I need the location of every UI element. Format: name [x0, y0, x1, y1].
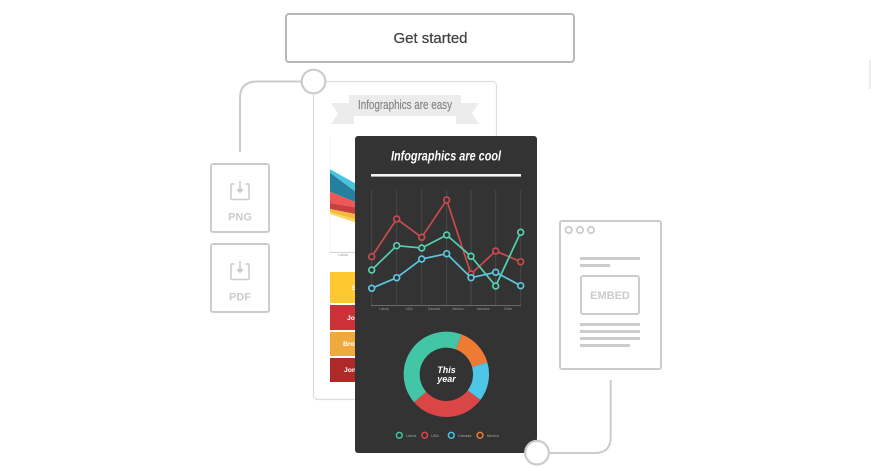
- embed button: EMBED: [590, 290, 630, 302]
- donut legend: Canada: [458, 434, 472, 438]
- line chart: Canada: [428, 307, 440, 311]
- table rows: Smith: [352, 285, 370, 292]
- icon: PDF download: [231, 261, 249, 280]
- donut chart: [412, 340, 481, 409]
- line chart: [369, 190, 524, 311]
- line chart: Jamaica: [476, 307, 490, 311]
- donut centre label: [436, 365, 456, 384]
- get started button: Get started: [394, 31, 468, 47]
- series: green: [369, 229, 524, 289]
- donut legend: Mexico: [487, 434, 499, 438]
- panel: light infographic sample: [314, 82, 496, 400]
- bottom connector circle: [525, 441, 549, 465]
- series: blue: [369, 251, 524, 291]
- table rows: John: [347, 315, 363, 322]
- donut centre label: year: [436, 374, 456, 384]
- line chart: USA: [405, 307, 413, 311]
- connector: embed window to bottom circle: [549, 380, 611, 453]
- top connector circle: [302, 70, 325, 93]
- line chart: Mexico: [452, 307, 464, 311]
- line chart: Latvia: [379, 307, 389, 311]
- dark panel title: Infographics are cool: [391, 148, 501, 164]
- donut centre label: This: [437, 365, 456, 375]
- embed browser window: [560, 221, 661, 369]
- ribbon heading: [331, 95, 479, 124]
- table rows: Brown: [343, 341, 364, 348]
- area chart: Latvia: [338, 253, 348, 257]
- donut legend: USA: [431, 434, 439, 438]
- table rows: [330, 272, 370, 382]
- PDF download card: [211, 244, 269, 312]
- PDF download card: PDF: [229, 292, 251, 304]
- PNG download card: [211, 164, 269, 232]
- table rows: Jones: [344, 367, 364, 374]
- line chart: Chile: [504, 307, 512, 311]
- donut legend: Latvia: [406, 434, 417, 438]
- window dots: [566, 227, 594, 233]
- panel: dark infographic sample: [355, 136, 537, 453]
- icon: PNG download: [231, 181, 249, 200]
- get started button: [286, 14, 574, 62]
- donut legend: [396, 432, 499, 438]
- ribbon heading: Infographics are easy: [358, 98, 453, 112]
- embed button: [581, 276, 639, 314]
- series: red: [369, 197, 524, 277]
- area chart: [330, 136, 360, 257]
- connector: top circle to export icons: [240, 82, 302, 152]
- PNG download card: PNG: [228, 212, 252, 224]
